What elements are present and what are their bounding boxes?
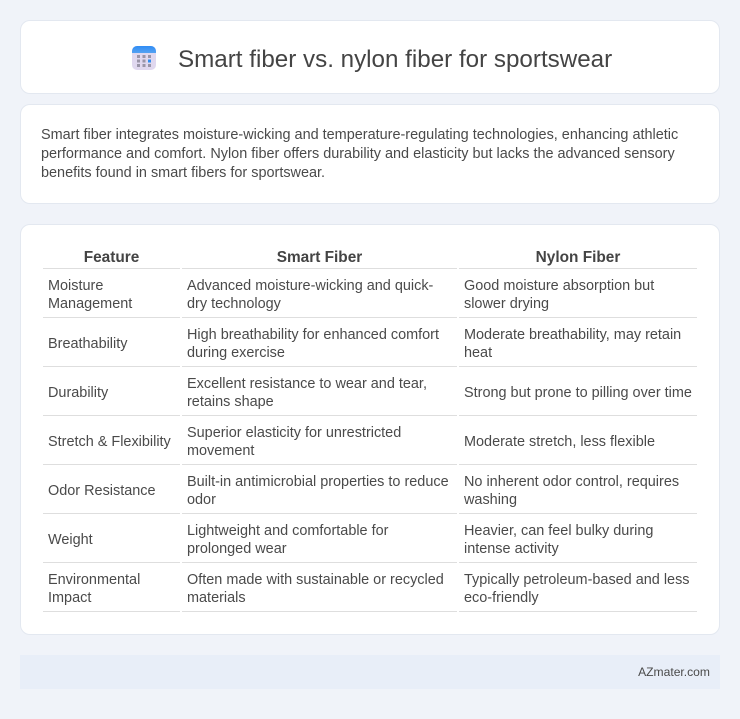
cell: nylon fiber moisture xyxy=(464,278,654,312)
row: Environmental Impact xyxy=(48,572,140,606)
row: Environmental Impact: Impact xyxy=(48,590,91,606)
cell: smart fiber moisture: Advanced moisture-wicking and quick- xyxy=(187,278,433,294)
cell: smart fiber moisture xyxy=(187,278,433,312)
cell: smart fiber stretch xyxy=(187,425,401,459)
panel: title card xyxy=(20,20,720,94)
row: Durability: Durability xyxy=(48,385,108,401)
cell: smart fiber odor: odor xyxy=(187,492,216,508)
text block: summary: benefits found in smart fibers for sportswear. xyxy=(41,165,325,181)
cell: nylon fiber breathability xyxy=(464,327,681,361)
cell: nylon fiber weight: intense activity xyxy=(464,541,559,557)
cell: nylon fiber odor: washing xyxy=(464,492,517,508)
text block: summary: performance and comfort. Nylon fiber offers durability and elasticity but lacks the advanced sensory xyxy=(41,146,675,162)
footer bar xyxy=(20,655,720,689)
header: Feature: Feature xyxy=(84,249,139,266)
cell: smart fiber odor: Built-in antimicrobial properties to reduce xyxy=(187,474,449,490)
cell: nylon fiber moisture: Good moisture absorption but xyxy=(464,278,654,294)
cell: smart fiber stretch: Superior elasticity for unrestricted xyxy=(187,425,401,441)
cell: nylon fiber durability: Strong but prone to pilling over time xyxy=(464,385,692,401)
icon: calendar xyxy=(132,46,156,70)
text block: summary xyxy=(41,127,678,181)
cell: smart fiber durability: Excellent resistance to wear and tear, xyxy=(187,376,427,392)
cell: smart fiber environmental: Often made with sustainable or recycled xyxy=(187,572,444,588)
cell: smart fiber weight xyxy=(187,523,388,557)
row: Odor Resistance: Odor Resistance xyxy=(48,483,156,499)
cell: smart fiber weight: prolonged wear xyxy=(187,541,287,557)
panel: comparison table card xyxy=(20,224,720,635)
row: Breathability: Breathability xyxy=(48,336,127,352)
text block: summary: Smart fiber integrates moisture-wicking and temperature-regulating technologies, enhancing athletic xyxy=(41,127,678,143)
row: Moisture Management: Management xyxy=(48,296,132,312)
footer credit: AZmater.com xyxy=(638,665,710,679)
cell: smart fiber environmental: materials xyxy=(187,590,246,606)
panel: summary card xyxy=(20,104,720,204)
cell: nylon fiber stretch: Moderate stretch, less flexible xyxy=(464,434,655,450)
cell: nylon fiber environmental: eco-friendly xyxy=(464,590,539,606)
row: Environmental Impact: Environmental xyxy=(48,572,140,588)
row: Weight: Weight xyxy=(48,532,93,548)
cell: smart fiber environmental xyxy=(187,572,444,606)
cell: nylon fiber moisture: slower drying xyxy=(464,296,549,312)
cell: nylon fiber breathability: Moderate breathability, may retain xyxy=(464,327,681,343)
cell: nylon fiber odor xyxy=(464,474,679,508)
row: Moisture Management xyxy=(48,278,132,312)
cell: nylon fiber weight: Heavier, can feel bulky during xyxy=(464,523,653,539)
header: Nylon Fiber: Nylon Fiber xyxy=(536,249,620,266)
cell: smart fiber breathability xyxy=(187,327,439,361)
cell: smart fiber stretch: movement xyxy=(187,443,254,459)
cell: smart fiber odor xyxy=(187,474,449,508)
cell: nylon fiber breathability: heat xyxy=(464,345,492,361)
row: Stretch & Flexibility: Stretch & Flexibility xyxy=(48,434,171,450)
row: Moisture Management: Moisture xyxy=(48,278,103,294)
cell: smart fiber moisture: dry technology xyxy=(187,296,281,312)
cell: nylon fiber environmental: Typically petroleum-based and less xyxy=(464,572,690,588)
cell: smart fiber breathability: High breathability for enhanced comfort xyxy=(187,327,439,343)
title: Smart fiber vs. nylon fiber for sportswear xyxy=(178,46,612,73)
cell: smart fiber durability xyxy=(187,376,427,410)
cell: nylon fiber odor: No inherent odor control, requires xyxy=(464,474,679,490)
header: Smart Fiber: Smart Fiber xyxy=(277,249,362,266)
cell: smart fiber durability: retains shape xyxy=(187,394,274,410)
cell: nylon fiber weight xyxy=(464,523,653,557)
cell: smart fiber breathability: during exercise xyxy=(187,345,285,361)
cell: smart fiber weight: Lightweight and comfortable for xyxy=(187,523,388,539)
cell: nylon fiber environmental xyxy=(464,572,690,606)
